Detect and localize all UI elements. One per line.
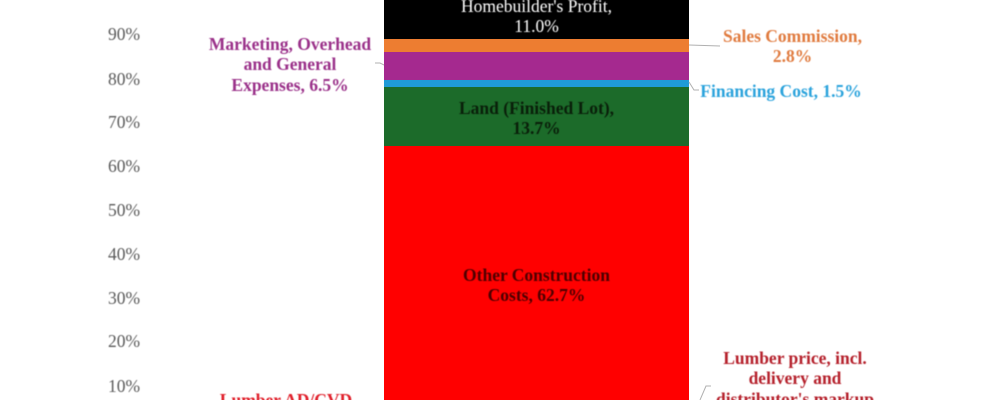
label: financing cost: Financing Cost, 1.5% (700, 81, 862, 101)
leader: financing cost (689, 82, 699, 90)
label: marketing: Marketing, Overhead (209, 34, 371, 54)
axis labels: 20% (108, 330, 140, 350)
label: marketing (208, 34, 372, 96)
segment: financing cost (384, 80, 689, 87)
label: sales commission (723, 26, 862, 66)
label: other construction costs (463, 265, 610, 305)
axis labels: 50% (108, 200, 140, 220)
axis labels: 60% (108, 156, 140, 176)
segment: sales commission (384, 39, 689, 52)
axis labels: 10% (108, 376, 140, 396)
label: homebuilder's profit (461, 0, 612, 36)
leader: lumber price (700, 386, 711, 400)
axis labels: 70% (108, 112, 140, 132)
label: land (459, 98, 614, 138)
leader: marketing (375, 63, 384, 65)
segment: land (384, 87, 689, 146)
label: marketing: and General (244, 54, 336, 74)
stacked bar (384, 0, 689, 400)
axis labels (108, 24, 140, 396)
label: land: Land (Finished Lot), (459, 98, 614, 118)
axis labels: 30% (108, 288, 140, 308)
label: marketing: Expenses, 6.5% (231, 75, 349, 95)
label: other construction costs: Costs, 62.7% (488, 285, 585, 305)
axis labels: 40% (108, 244, 140, 264)
label: sales commission: Sales Commission, (723, 26, 862, 46)
label: other construction costs: Other Construction (463, 265, 610, 285)
segment: other construction costs (384, 146, 689, 400)
label: land: 13.7% (512, 118, 561, 138)
segment: homebuilder's profit (384, 0, 689, 39)
axis labels: 90% (108, 24, 140, 44)
label: lumber price (716, 348, 874, 400)
label: sales commission: 2.8% (773, 46, 812, 66)
segment: marketing, overhead and general expenses (384, 52, 689, 80)
label: homebuilder's profit: 11.0% (514, 16, 559, 36)
label: lumber price: Lumber price, incl. (723, 348, 867, 368)
axis labels: 80% (108, 68, 140, 88)
leader: sales commission (689, 45, 720, 46)
label: lumber price: delivery and (749, 368, 841, 388)
